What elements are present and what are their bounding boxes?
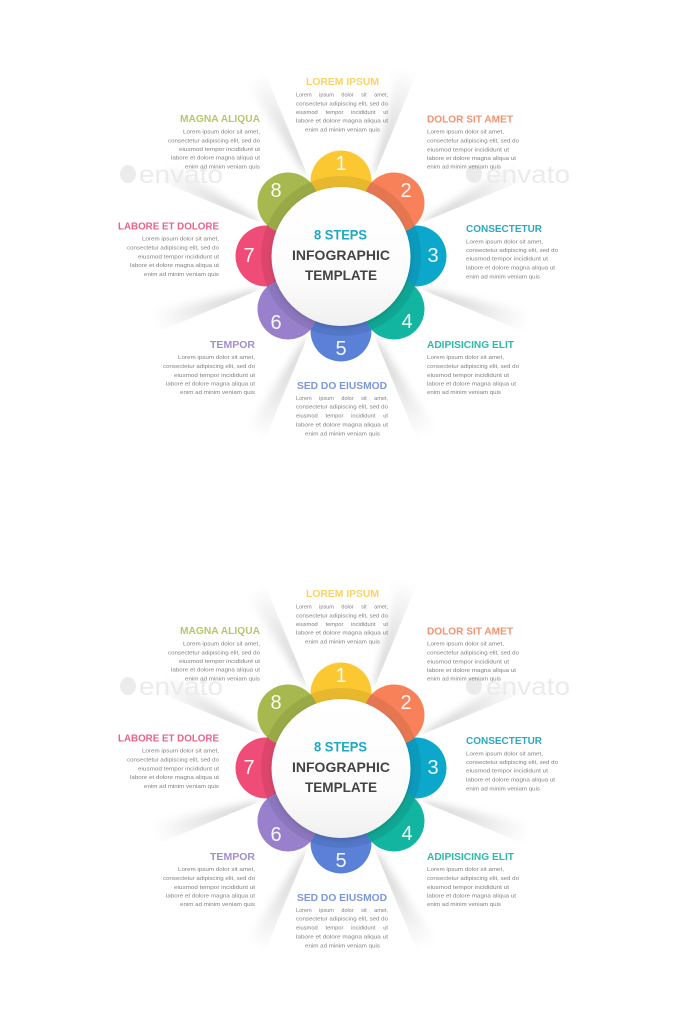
watermark right: envato: [486, 673, 570, 701]
text block: step 8: labore et dolore magna aliqua ut: [171, 156, 260, 162]
petal 1: [310, 150, 372, 212]
text block: step 4: Lorem ipsum dolor sit amet,: [427, 355, 504, 361]
panel: top 8 steps diagram: [118, 78, 569, 436]
step numbers: 1: [335, 153, 347, 175]
text block: step 7: Lorem ipsum dolor sit amet,: [142, 748, 219, 754]
text block: step 1: Lorem ipsum dolor sit amet,: [296, 605, 388, 611]
text block: step 6: Lorem ipsum dolor sit amet,: [178, 867, 255, 873]
watermark left: envato: [139, 161, 223, 189]
text block: step 6: [163, 851, 256, 908]
text block: step 5: enim ad minim veniam quis: [305, 943, 380, 949]
text block: step 2: [427, 625, 519, 683]
step numbers: 7: [243, 757, 255, 779]
text block: step 5: SED DO EIUSMOD: [297, 380, 387, 392]
petals: [236, 150, 446, 362]
text block: step 5: consectetur adipiscing elit, sed do: [296, 405, 388, 411]
text block: step 4: labore et dolore magna aliqua ut: [427, 382, 516, 388]
text block: step 1: consectetur adipiscing elit, sed do: [296, 613, 388, 619]
step numbers: 6: [270, 312, 282, 334]
petal 7: [236, 738, 296, 798]
center title: TEMPLATE: [305, 267, 377, 283]
text block: step 2: eiusmod tempor incididunt ut: [427, 659, 510, 665]
text block: step 8: consectetur adipiscing elit, sed do: [168, 138, 260, 144]
text block: step 1: enim ad minim veniam quis: [305, 639, 380, 645]
text block: step 2: consectetur adipiscing elit, sed do: [427, 650, 519, 656]
text block: step 7: [118, 220, 220, 278]
text block: step 7: enim ad minim veniam quis: [144, 784, 219, 790]
text block: step 6: eiusmod tempor incididunt ut: [174, 885, 256, 891]
text block: step 5: [296, 892, 389, 949]
text block: step 8: eiusmod tempor incididunt ut: [179, 659, 261, 665]
text block: step 7: consectetur adipiscing elit, sed do: [127, 245, 219, 251]
petal 3: [386, 738, 446, 798]
step numbers: 3: [427, 757, 439, 779]
text block: step 8: MAGNA ALIQUA: [180, 625, 260, 637]
text block: step 2: DOLOR SIT AMET: [427, 625, 514, 637]
step numbers: 8: [270, 180, 282, 202]
text block: step 4: labore et dolore magna aliqua ut: [427, 894, 516, 900]
text block: step 5: labore et dolore magna aliqua ut: [296, 422, 389, 428]
text block: step 8: eiusmod tempor incididunt ut: [179, 147, 261, 153]
text block: step 2: Lorem ipsum dolor sit amet,: [427, 642, 504, 648]
petal 6: [258, 790, 318, 852]
text block: step 6: enim ad minim veniam quis: [180, 902, 255, 908]
text block: step 7: enim ad minim veniam quis: [144, 272, 219, 278]
center circle: [272, 699, 410, 838]
text block: step 3: CONSECTETUR: [466, 223, 542, 235]
petal 3: [386, 226, 446, 286]
center title: [292, 226, 390, 283]
text block: step 8: consectetur adipiscing elit, sed do: [168, 650, 260, 656]
center title: 8 STEPS: [314, 226, 367, 242]
text block: step 4: consectetur adipiscing elit, sed do: [427, 364, 519, 370]
text block: step 3: [466, 735, 558, 792]
petal 2: [364, 172, 424, 234]
text block: step 4: Lorem ipsum dolor sit amet,: [427, 867, 504, 873]
text block: step 1: consectetur adipiscing elit, sed do: [296, 101, 388, 107]
text block: step 8: Lorem ipsum dolor sit amet,: [183, 642, 260, 648]
text block: step 3: labore et dolore magna aliqua ut: [466, 778, 555, 784]
text block: step 3: consectetur adipiscing elit, sed do: [466, 760, 558, 766]
text block: step 1: labore et dolore magna aliqua ut: [296, 119, 389, 125]
text block: step 5: consectetur adipiscing elit, sed do: [296, 917, 388, 923]
text block: step 1: labore et dolore magna aliqua ut: [296, 631, 389, 637]
text block: step 8: labore et dolore magna aliqua ut: [171, 668, 260, 674]
center title: INFOGRAPHIC: [292, 247, 390, 263]
text block: step 2: consectetur adipiscing elit, sed do: [427, 138, 519, 144]
wedge shadows: [170, 597, 512, 934]
text block: step 3: eiusmod tempor incididunt ut: [466, 257, 549, 263]
text block: step 5: eiusmod tempor incididunt ut: [296, 926, 388, 932]
text block: step 7: labore et dolore magna aliqua ut: [130, 775, 219, 781]
text block: step 4: [427, 339, 519, 396]
text block: step 7: eiusmod tempor incididunt ut: [138, 766, 220, 772]
text block: step 7: [118, 732, 220, 790]
center title: [292, 738, 390, 795]
text block: step 2: [427, 113, 519, 171]
text block: step 6: labore et dolore magna aliqua ut: [166, 894, 255, 900]
petal inner dark band: [261, 688, 421, 848]
text block: step 7: Lorem ipsum dolor sit amet,: [142, 236, 219, 242]
text block: step 4: consectetur adipiscing elit, sed do: [427, 876, 519, 882]
petal 1: [310, 662, 372, 724]
text block: step 4: ADIPISICING ELIT: [427, 339, 515, 351]
petal inner dark band: [261, 176, 421, 336]
text block: step 2: enim ad minim veniam quis: [427, 677, 501, 683]
step numbers: 7: [243, 245, 255, 267]
center title: INFOGRAPHIC: [292, 759, 390, 775]
text block: step 1: Lorem ipsum dolor sit amet,: [296, 93, 388, 99]
text block: step 2: enim ad minim veniam quis: [427, 165, 501, 171]
text block: step 6: consectetur adipiscing elit, sed do: [163, 876, 255, 882]
text block: step 6: TEMPOR: [210, 851, 255, 863]
text block: step 4: enim ad minim veniam quis: [427, 902, 501, 908]
panel: bottom 8 steps diagram: [118, 590, 569, 948]
text block: step 4: eiusmod tempor incididunt ut: [427, 373, 510, 379]
text block: step 3: CONSECTETUR: [466, 735, 542, 747]
petal 5: [310, 812, 372, 874]
text block: step 1: LOREM IPSUM: [306, 588, 379, 600]
text block: step 3: Lorem ipsum dolor sit amet,: [466, 751, 543, 757]
text block: step 6: Lorem ipsum dolor sit amet,: [178, 355, 255, 361]
step numbers: 3: [427, 245, 439, 267]
text block: step 1: LOREM IPSUM: [306, 76, 379, 88]
text block: step 4: [427, 851, 519, 908]
text block: step 7: consectetur adipiscing elit, sed do: [127, 757, 219, 763]
text block: step 7: eiusmod tempor incididunt ut: [138, 254, 220, 260]
center title: TEMPLATE: [305, 779, 377, 795]
text block: step 4: eiusmod tempor incididunt ut: [427, 885, 510, 891]
text block: step 3: consectetur adipiscing elit, sed do: [466, 248, 558, 254]
text block: step 3: [466, 223, 558, 280]
text block: step 5: SED DO EIUSMOD: [297, 892, 387, 904]
step numbers: 5: [335, 338, 347, 360]
step numbers: 6: [270, 824, 282, 846]
text block: step 8: Lorem ipsum dolor sit amet,: [183, 130, 260, 136]
step numbers: 8: [270, 692, 282, 714]
text block: step 3: labore et dolore magna aliqua ut: [466, 266, 555, 272]
text block: step 4: ADIPISICING ELIT: [427, 851, 515, 863]
text block: step 8: MAGNA ALIQUA: [180, 113, 260, 125]
text block: step 1: [296, 588, 389, 645]
petal 5: [310, 300, 372, 362]
text block: step 5: [296, 380, 389, 437]
step numbers: 2: [400, 692, 412, 714]
step numbers: [243, 153, 439, 360]
text block: step 8: enim ad minim veniam quis: [185, 676, 260, 682]
petals: [236, 662, 446, 874]
text block: step 3: enim ad minim veniam quis: [466, 274, 540, 280]
step numbers: [243, 665, 439, 872]
text block: step 6: labore et dolore magna aliqua ut: [166, 382, 255, 388]
text block: step 1: [296, 76, 389, 133]
watermark right: envato: [486, 161, 570, 189]
text block: step 4: enim ad minim veniam quis: [427, 390, 501, 396]
text block: step 2: DOLOR SIT AMET: [427, 113, 514, 125]
text block: step 5: Lorem ipsum dolor sit amet,: [296, 396, 388, 402]
text block: step 8: [168, 625, 261, 682]
step numbers: 2: [400, 180, 412, 202]
text block: step 7: labore et dolore magna aliqua ut: [130, 263, 219, 269]
step numbers: 5: [335, 850, 347, 872]
text block: step 7: LABORE ET DOLORE: [118, 732, 219, 744]
text block: step 6: consectetur adipiscing elit, sed do: [163, 364, 255, 370]
text block: step 6: TEMPOR: [210, 339, 255, 351]
petal 4: [364, 790, 424, 852]
text block: step 5: enim ad minim veniam quis: [305, 431, 380, 437]
text block: step 6: enim ad minim veniam quis: [180, 390, 255, 396]
text block: step 8: enim ad minim veniam quis: [185, 164, 260, 170]
petal 7: [236, 226, 296, 286]
text block: step 6: eiusmod tempor incididunt ut: [174, 373, 256, 379]
petal 2: [364, 684, 424, 746]
text block: step 2: labore et dolore magna aliqua ut: [427, 156, 516, 162]
text block: step 1: eiusmod tempor incididunt ut: [296, 110, 388, 116]
text block: step 3: eiusmod tempor incididunt ut: [466, 769, 549, 775]
text block: step 1: eiusmod tempor incididunt ut: [296, 622, 388, 628]
text block: step 5: Lorem ipsum dolor sit amet,: [296, 908, 388, 914]
text block: step 2: eiusmod tempor incididunt ut: [427, 147, 510, 153]
text block: step 2: labore et dolore magna aliqua ut: [427, 668, 516, 674]
step numbers: 4: [401, 823, 413, 845]
text block: step 1: enim ad minim veniam quis: [305, 127, 380, 133]
text block: step 6: [163, 339, 256, 396]
step numbers: 1: [335, 665, 347, 687]
text block: step 7: LABORE ET DOLORE: [118, 220, 219, 232]
watermark left: envato: [139, 673, 223, 701]
petal 8: [258, 684, 318, 746]
center circle: [272, 187, 410, 326]
text block: step 5: labore et dolore magna aliqua ut: [296, 934, 389, 940]
text block: step 8: [168, 113, 261, 170]
text block: step 2: Lorem ipsum dolor sit amet,: [427, 130, 504, 136]
text block: step 3: enim ad minim veniam quis: [466, 786, 540, 792]
wedge shadows: [170, 85, 512, 422]
text block: step 3: Lorem ipsum dolor sit amet,: [466, 239, 543, 245]
text block: step 5: eiusmod tempor incididunt ut: [296, 414, 388, 420]
step numbers: 4: [401, 311, 413, 333]
petal 4: [364, 278, 424, 340]
petal 6: [258, 278, 318, 340]
center title: 8 STEPS: [314, 738, 367, 754]
petal 8: [258, 172, 318, 234]
